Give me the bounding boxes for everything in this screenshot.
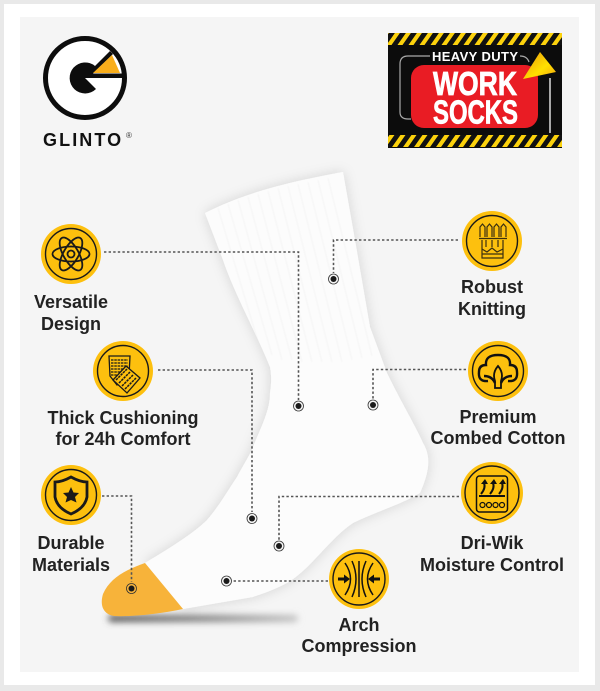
badge: heavy duty work socks: HEAVY DUTY [432, 49, 518, 64]
white sock [102, 172, 428, 616]
sock toe [102, 563, 183, 616]
icon: cushions [93, 341, 153, 401]
label: durable materials [32, 533, 110, 575]
leader: durable materials [102, 496, 136, 594]
logo: Glinto: GLINTO [43, 130, 123, 150]
leader: premium cotton [368, 370, 466, 410]
label: premium combed cotton: Premium [459, 407, 537, 427]
label: versatile design [34, 292, 108, 334]
icon: knitting machine [462, 211, 522, 271]
badge: heavy duty work socks: WORK [433, 65, 517, 102]
label: arch compression [301, 615, 417, 656]
leader: versatile design [104, 252, 304, 411]
icon: atom [41, 224, 101, 284]
logo: Glinto [43, 38, 132, 150]
label: arch compression: Compression [301, 636, 417, 656]
label: versatile design: Versatile [34, 292, 108, 312]
leader: thick cushioning [158, 370, 257, 524]
label: robust knitting [458, 277, 526, 319]
label: robust knitting: Robust [461, 277, 523, 297]
label: thick cushioning: for 24h Comfort [56, 429, 191, 449]
label: thick cushioning: Thick Cushioning [48, 408, 198, 428]
leader: arch compression [222, 576, 328, 586]
label: thick cushioning [48, 408, 198, 449]
label: versatile design: Design [41, 314, 101, 334]
ground shadow [108, 615, 298, 622]
badge: heavy duty work socks: SOCKS [433, 94, 518, 130]
icon: shield star [41, 465, 101, 525]
label: dri-wik moisture control: Dri-Wik [461, 533, 524, 553]
badge: heavy duty work socks [388, 33, 562, 148]
icon: moisture wicking [461, 462, 523, 524]
label: arch compression: Arch [338, 615, 380, 635]
leader: dri-wik [274, 496, 459, 551]
label: dri-wik moisture control [420, 533, 564, 575]
label: premium combed cotton [431, 407, 565, 448]
label: dri-wik moisture control: Moisture Control [420, 555, 564, 575]
label: robust knitting: Knitting [458, 299, 526, 319]
label: durable materials: Materials [32, 555, 110, 575]
leader: robust knitting [328, 240, 458, 284]
label: durable materials: Durable [37, 533, 105, 553]
icon: arch compression [329, 549, 389, 609]
logo: Glinto: ® [126, 131, 132, 140]
icon: cotton [468, 341, 528, 401]
label: premium combed cotton: Combed Cotton [431, 428, 565, 448]
